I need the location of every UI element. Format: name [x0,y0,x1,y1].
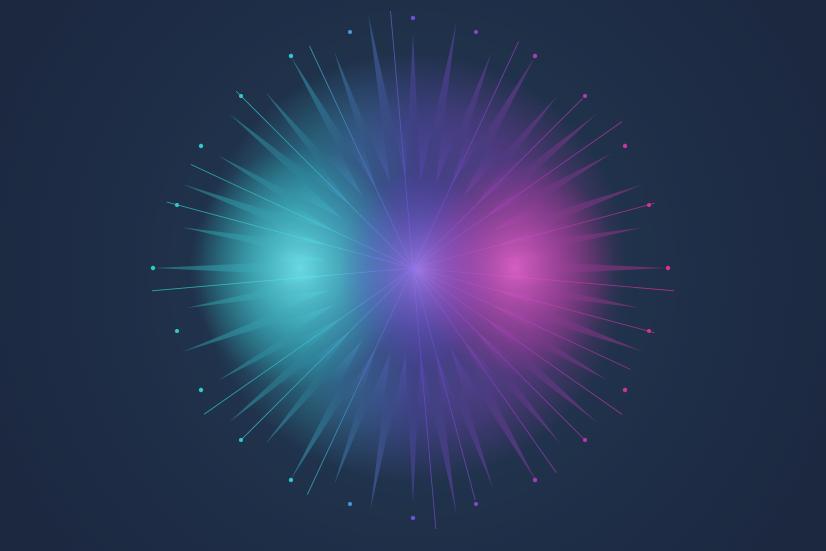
glow: cyan [190,148,410,388]
glow: magenta [415,158,615,378]
illustration: particle burst [150,11,674,529]
burst: gradient spikes [150,11,674,529]
glow: violet [340,170,500,370]
